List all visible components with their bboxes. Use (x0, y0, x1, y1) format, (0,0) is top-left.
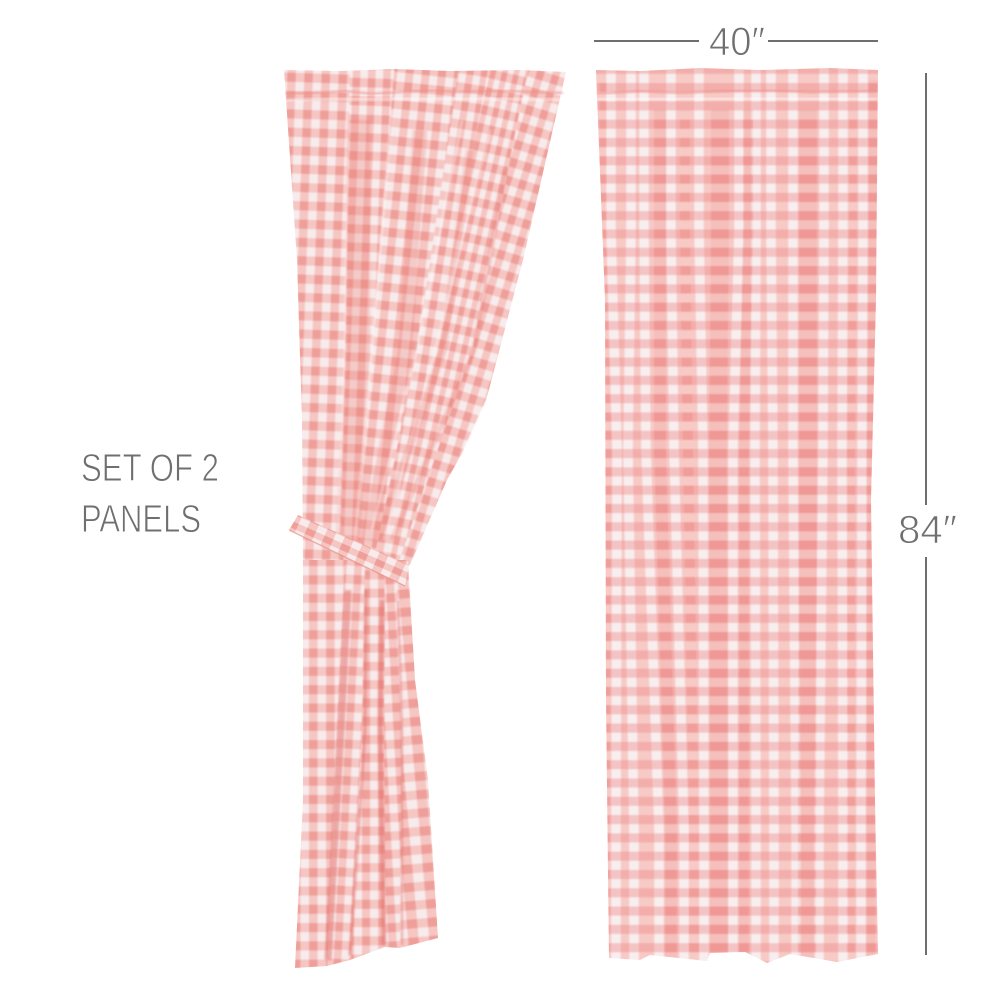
left curtain panel, tied back (280, 60, 575, 975)
lower pleats below the tie-back (295, 560, 438, 968)
width dimension: 40 inches: 40″ (709, 20, 765, 64)
right curtain panel, hanging straight (590, 60, 885, 970)
gathered rod pocket header (597, 90, 877, 100)
label: set of 2 panels: PANELS (81, 498, 201, 541)
gathered rod pocket header (286, 90, 563, 101)
height dimension: 84 inches: 84″ (898, 508, 957, 552)
label: set of 2 panels: SET OF 2 (81, 447, 219, 490)
tie-back band (289, 515, 409, 586)
label: set of 2 panels (81, 447, 219, 541)
upper pleats fanning to the tie-back (280, 60, 575, 570)
